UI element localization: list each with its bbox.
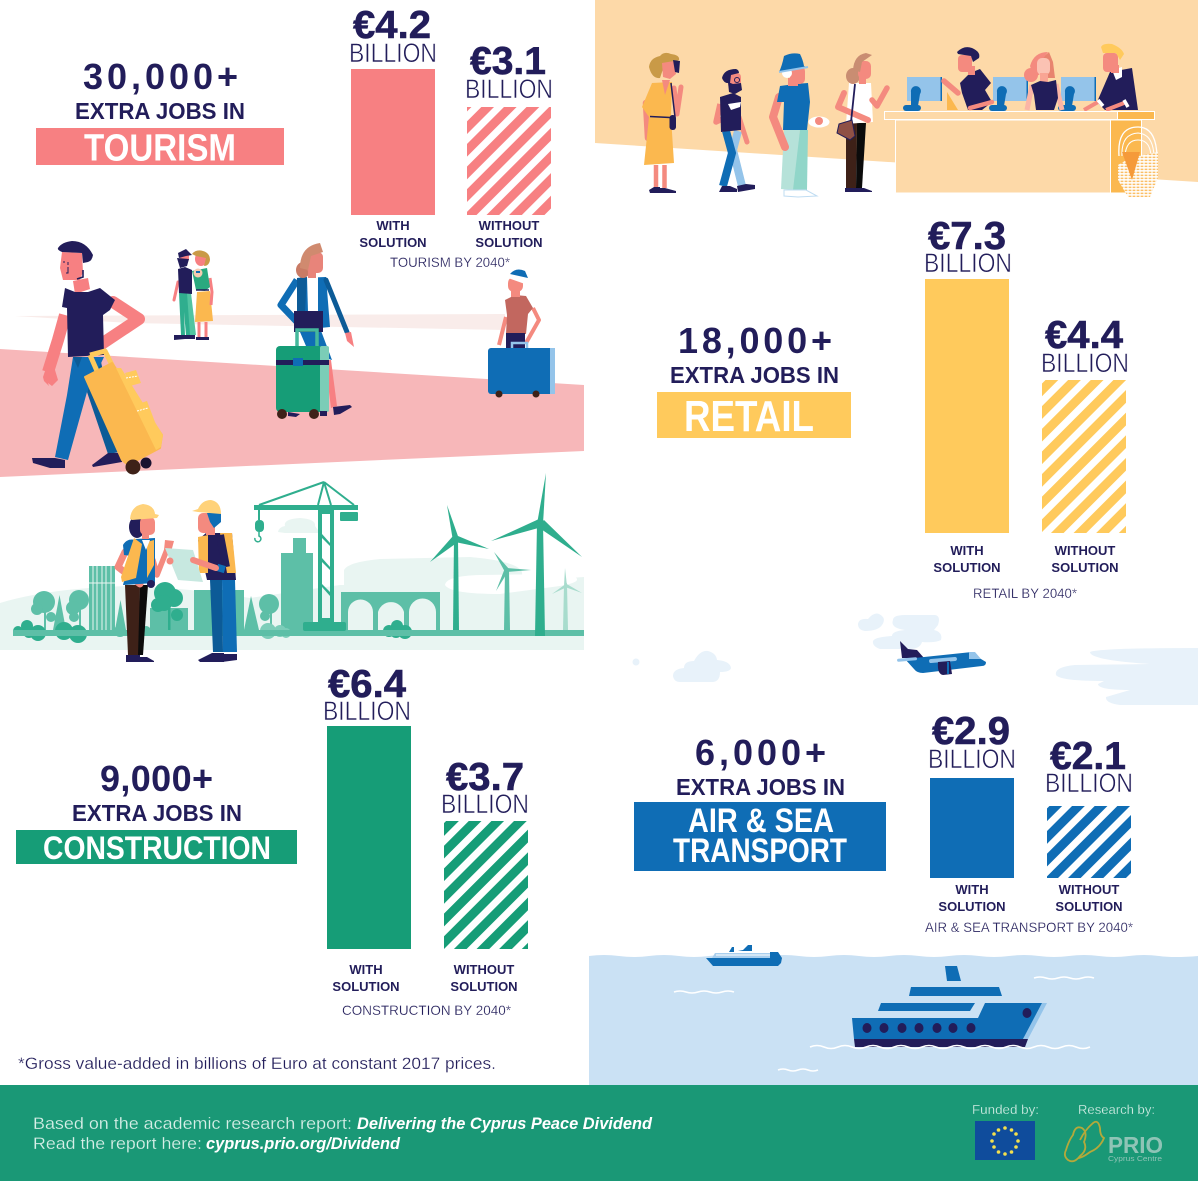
sky illustration [632,614,1198,705]
bar: tourism without solution: SOLUTION [475,235,543,250]
bar: transport without solution: BILLION [1045,768,1133,798]
retail heading: 18,000+ [678,320,832,361]
customer: person with blue hat [773,53,830,197]
clerk: woman with pink hair [1024,52,1062,110]
bar: tourism without solution: WITHOUT [479,218,539,233]
bar: transport without solution: SOLUTION [1055,899,1123,914]
construction heading: 9,000+ [100,758,213,799]
bar: construction with solution: SOLUTION [332,979,400,994]
source text [33,1114,653,1153]
bar: retail with solution: WITH [950,543,984,558]
service desk [884,112,1154,193]
icon: large ship [852,966,1047,1047]
bar: retail with solution: €7.3 [928,215,1006,258]
research partner: PRIO logo: Research by: [1078,1103,1155,1117]
sea background [589,955,1198,1085]
icon: airplane [897,641,986,675]
bar: transport without solution: WITHOUT [1059,882,1119,897]
tourism heading: TOURISM [84,128,236,170]
transport heading: EXTRA JOBS IN [676,774,845,800]
wind turbines [430,473,582,636]
bar: transport with solution: BILLION [928,744,1016,774]
bar: retail with solution [924,215,1012,575]
retail caption: RETAIL BY 2040* [973,585,1078,601]
construction illustration [0,473,584,662]
tourism heading: EXTRA JOBS IN [75,98,245,124]
construction heading [16,758,297,866]
footnote: *Gross value-added in billions of Euro at constant 2017 prices. [18,1054,496,1073]
bar: transport with solution: €2.9 [932,710,1010,753]
pale band [15,314,505,330]
transport caption: AIR & SEA TRANSPORT BY 2040* [925,919,1134,935]
research partner: PRIO logo [1065,1103,1163,1163]
water ripples [674,977,1094,1071]
worker with map: woman [118,504,174,662]
ground line [13,630,584,636]
bar: construction without solution: €3.7 [446,756,524,799]
transport heading: TRANSPORT [673,832,847,870]
construction heading: EXTRA JOBS IN [72,800,242,826]
tourism heading: 30,000+ [83,56,238,97]
retail heading [657,320,851,441]
bar: retail with solution: SOLUTION [933,560,1001,575]
source text: Delivering the Cyprus Peace Dividend [357,1114,653,1133]
crane [254,482,358,631]
source text: Based on the academic research report: [33,1114,352,1133]
bar: retail without solution: €4.4 [1045,314,1123,357]
bar: construction with solution [323,663,411,994]
businesswoman with green suitcase [276,243,354,419]
customer: woman in yellow dress [642,53,681,193]
panel: tourism chart [36,4,553,270]
bar: construction without solution: BILLION [441,789,529,819]
source text: Read the report here: [33,1134,202,1153]
bar: tourism without solution: BILLION [465,74,553,104]
source text: cyprus.prio.org/Dividend [206,1134,401,1153]
bar: transport with solution [928,710,1016,914]
panel: transport chart [634,710,1134,935]
research partner: PRIO logo: Cyprus Centre [1108,1154,1162,1163]
bar: transport without solution: €2.1 [1050,735,1126,778]
bar: tourism with solution: €4.2 [353,4,431,47]
clerk: pointing man [944,47,992,110]
bar: tourism with solution: SOLUTION [359,235,427,250]
couple with child [174,249,213,340]
retail queue illustration [595,0,1198,197]
bar: tourism with solution: BILLION [349,38,437,68]
panel: retail chart [657,215,1129,601]
retail heading: EXTRA JOBS IN [670,362,839,388]
funder: EU flag [972,1103,1039,1160]
bar: retail without solution: BILLION [1041,348,1129,378]
customer: bearded man [716,69,755,192]
tourism heading [36,56,284,170]
bar: tourism with solution [349,4,437,250]
bar: construction without solution [441,756,529,994]
bar: transport without solution [1045,735,1133,914]
icon: wicker basket [1118,127,1158,197]
retail heading: RETAIL [684,392,814,441]
tourism illustration [0,241,584,477]
bar: construction without solution: SOLUTION [450,979,518,994]
bar: transport with solution: SOLUTION [938,899,1006,914]
clouds [632,614,1198,705]
tourism caption: TOURISM BY 2040* [390,254,511,270]
bar: retail without solution: SOLUTION [1051,560,1119,575]
transport heading: 6,000+ [695,732,826,773]
bar: tourism without solution: €3.1 [470,40,546,83]
transport heading: AIR & SEA [688,802,834,840]
bar: transport with solution: WITH [955,882,989,897]
bar: tourism without solution [465,40,553,250]
clerk: blonde man [1084,44,1138,110]
transport heading [634,732,886,871]
construction heading: CONSTRUCTION [43,830,271,866]
orange backdrop [595,0,1198,182]
bar: construction with solution: BILLION [323,696,411,726]
icon: small cruise ship [706,945,782,966]
bar: retail with solution: BILLION [924,248,1012,278]
footer background [0,1085,1198,1181]
research partner: PRIO logo: PRIO [1108,1132,1163,1158]
monitors [903,77,1096,111]
bar: construction without solution: WITHOUT [454,962,514,977]
bar: construction with solution: WITH [349,962,383,977]
bar: retail without solution [1041,314,1129,575]
customer: woman with handbag [837,53,887,192]
bar: tourism with solution: WITH [376,218,410,233]
child with blue suitcase [488,269,555,398]
traveller man with yellow suitcase [32,241,163,474]
bar: retail without solution: WITHOUT [1055,543,1115,558]
pale landscape [0,585,584,650]
panel: construction chart [16,663,529,1018]
trees and bushes [13,582,412,643]
pink road [0,349,584,477]
buildings [53,538,440,632]
footer [0,1085,1198,1181]
worker with map: man [165,500,237,662]
funder: EU flag: Funded by: [972,1103,1039,1117]
bar: construction with solution: €6.4 [328,663,406,706]
construction caption: CONSTRUCTION BY 2040* [342,1002,512,1018]
sea illustration [589,945,1198,1085]
